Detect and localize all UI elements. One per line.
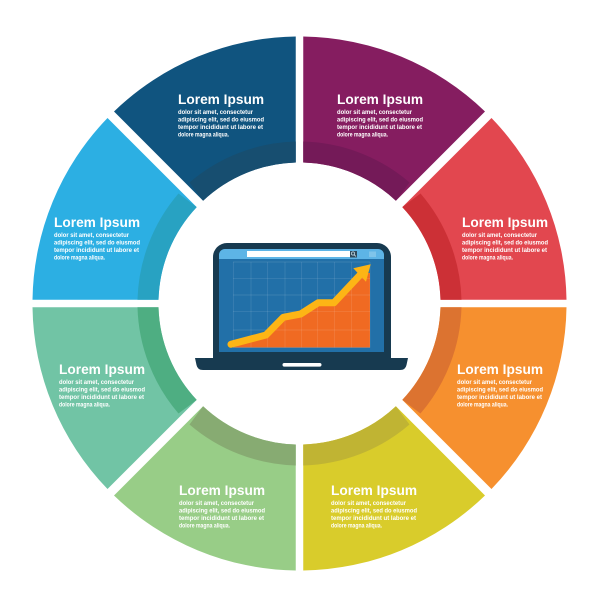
text: yellow segment: adipiscing elit, sed do eiusmod <box>331 508 417 514</box>
text: navy segment: dolore magna aliqua. <box>178 132 229 138</box>
text: purple segment: dolor sit amet, consectetur <box>337 109 412 116</box>
laptop base <box>195 358 408 370</box>
text: teal segment: tempor incididunt ut labore et <box>59 394 145 401</box>
text: red segment: Lorem Ipsum <box>462 214 548 230</box>
text: red segment: dolor sit amet, consectetur <box>462 232 537 239</box>
text: blue segment: dolore magna aliqua. <box>54 254 105 262</box>
laptop screen <box>219 249 384 352</box>
text: navy segment <box>178 91 264 138</box>
text: blue segment <box>54 214 140 262</box>
panel: purple segment <box>303 36 485 201</box>
growth arrow <box>231 264 371 344</box>
text: light green segment <box>179 482 265 530</box>
text: navy segment: Lorem Ipsum <box>178 91 264 107</box>
text: teal segment: dolore magna aliqua. <box>59 402 110 408</box>
chart grid <box>233 262 370 348</box>
menu icon <box>369 252 376 257</box>
panel: teal segment <box>32 307 197 489</box>
text: red segment: tempor incididunt ut labore et <box>462 247 548 254</box>
text: red segment: dolore magna aliqua. <box>462 254 513 262</box>
trackpad notch <box>282 363 322 367</box>
text: blue segment: tempor incididunt ut labore et <box>54 247 140 254</box>
text: purple segment: adipiscing elit, sed do eiusmod <box>337 116 423 124</box>
text: yellow segment: dolore magna aliqua. <box>331 522 382 530</box>
text: blue segment: dolor sit amet, consectetur <box>54 232 129 239</box>
laptop lid <box>213 243 391 360</box>
text: orange segment: Lorem Ipsum <box>457 361 543 377</box>
text: teal segment <box>59 361 145 408</box>
search box <box>247 251 357 258</box>
panel: blue segment <box>32 118 197 300</box>
text: light green segment: dolore magna aliqua. <box>179 522 230 530</box>
text: teal segment: dolor sit amet, consectetur <box>59 379 134 386</box>
area chart <box>233 273 370 348</box>
text: blue segment: Lorem Ipsum <box>54 214 140 230</box>
text: yellow segment <box>331 482 417 530</box>
text: light green segment: Lorem Ipsum <box>179 482 265 498</box>
text: orange segment: dolor sit amet, consectetur <box>457 379 532 386</box>
text: purple segment: Lorem Ipsum <box>337 91 423 107</box>
text: light green segment: dolor sit amet, consectetur <box>179 500 254 507</box>
text: orange segment: dolore magna aliqua. <box>457 402 508 408</box>
panel: navy segment <box>114 36 296 201</box>
text: orange segment: tempor incididunt ut labore et <box>457 394 543 401</box>
text: yellow segment: tempor incididunt ut labore et <box>331 515 417 522</box>
text: light green segment: tempor incididunt ut labore et <box>179 515 265 522</box>
text: teal segment: adipiscing elit, sed do eiusmod <box>59 386 145 394</box>
text: navy segment: adipiscing elit, sed do eiusmod <box>178 116 264 124</box>
text: red segment: adipiscing elit, sed do eiusmod <box>462 240 548 246</box>
text: red segment <box>462 214 548 262</box>
panel: red segment <box>402 118 566 300</box>
text: teal segment: Lorem Ipsum <box>59 361 145 377</box>
panel: yellow segment <box>303 406 485 570</box>
panel: orange segment <box>402 307 566 489</box>
text: yellow segment: Lorem Ipsum <box>331 482 417 498</box>
text: blue segment: adipiscing elit, sed do eiusmod <box>54 240 140 246</box>
text: purple segment <box>337 91 423 138</box>
text: navy segment: tempor incididunt ut labore et <box>178 124 264 131</box>
icon: laptop with growth chart <box>195 243 408 370</box>
text: orange segment: adipiscing elit, sed do eiusmod <box>457 386 543 394</box>
text: orange segment <box>457 361 543 408</box>
text: purple segment: tempor incididunt ut labore et <box>337 124 423 131</box>
text: purple segment: dolore magna aliqua. <box>337 132 388 138</box>
panel: light green segment <box>114 406 296 570</box>
text: yellow segment: dolor sit amet, consectetur <box>331 500 406 507</box>
text: light green segment: adipiscing elit, sed do eiusmod <box>179 508 265 514</box>
text: navy segment: dolor sit amet, consectetur <box>178 109 253 116</box>
browser bar <box>219 249 384 259</box>
